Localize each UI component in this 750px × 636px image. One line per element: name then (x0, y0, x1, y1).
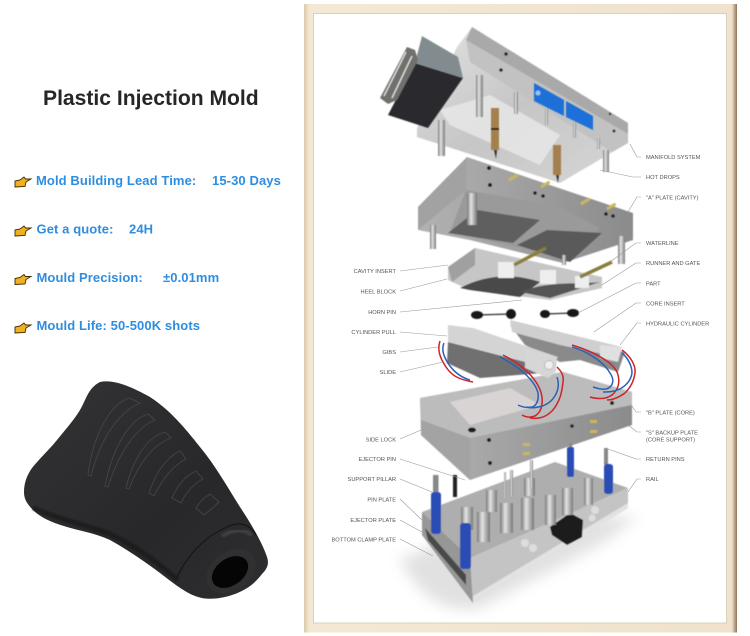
blue manifold panels (534, 83, 593, 130)
hot drops (491, 108, 561, 183)
hydraulic hoses (439, 341, 635, 418)
leader lines (400, 144, 641, 556)
part labels: right: MANIFOLD SYSTEM (646, 155, 701, 161)
feature list (15, 173, 281, 333)
part labels: right: HYDRAULIC CYLINDER (646, 322, 709, 328)
cavity inserts (448, 248, 612, 300)
part labels: left (332, 269, 397, 544)
parts (471, 309, 579, 319)
mould precision: Mould Precision: (36, 270, 143, 285)
part labels: left: CAVITY INSERT (354, 269, 397, 275)
quote time: Get a quote: (36, 222, 114, 236)
part labels: left: SUPPORT PILLAR (348, 477, 396, 483)
part labels: right (646, 155, 709, 483)
control box (380, 36, 463, 128)
ejector base with pillars (400, 443, 635, 609)
lead time: 15-30 Days (212, 173, 281, 188)
part labels: left: HORN PIN (368, 310, 396, 316)
part labels: right: RETURN PINS (646, 457, 685, 463)
lead time: Mold Building Lead Time: (36, 173, 196, 188)
part labels: left: CYLINDER PULL (351, 330, 396, 336)
mould life: Mould Life: 50-500K shots (36, 318, 200, 333)
product photo: black plastic part (24, 381, 268, 602)
part labels: right: "B" PLATE (CORE) (646, 410, 695, 416)
part labels: left: EJECTOR PIN (358, 457, 396, 463)
part labels: right: WATERLINE (646, 241, 679, 247)
exploded mold diagram (332, 27, 709, 609)
B plate (420, 372, 632, 480)
icon: pointing hand 3 (15, 274, 31, 284)
icon: pointing hand 4 (15, 323, 31, 333)
part labels: right: HOT DROPS (646, 175, 680, 181)
part labels: left: GIBS (382, 350, 396, 356)
part labels: right: CORE INSERT (646, 302, 685, 308)
part labels: right: RAIL (646, 477, 659, 483)
mould precision: ±0.01mm (163, 270, 219, 285)
icon: pointing hand 1 (15, 177, 31, 187)
part labels: right: "A" PLATE (CAVITY) (646, 196, 699, 202)
part labels: left: SLIDE (380, 370, 396, 376)
title: Plastic Injection Mold (43, 87, 259, 110)
part labels: left: SIDE LOCK (366, 438, 396, 444)
part labels: left: EJECTOR PLATE (350, 518, 396, 524)
icon: pointing hand 2 (15, 226, 31, 236)
quote time: 24H (129, 222, 153, 236)
part labels: left: PIN PLATE (367, 498, 396, 504)
part labels: right: (CORE SUPPORT) (646, 438, 695, 444)
picture frame (304, 4, 737, 632)
part labels: left: HEEL BLOCK (360, 290, 396, 296)
A plate (418, 157, 633, 265)
slides and cylinders (447, 320, 625, 378)
part labels: left: BOTTOM CLAMP PLATE (332, 538, 396, 544)
part labels: right: RUNNER AND GATE (646, 261, 700, 267)
part labels: right: PART (646, 282, 661, 288)
manifold system plate (417, 27, 628, 183)
part labels: right: "S" BACKUP PLATE (646, 430, 698, 436)
